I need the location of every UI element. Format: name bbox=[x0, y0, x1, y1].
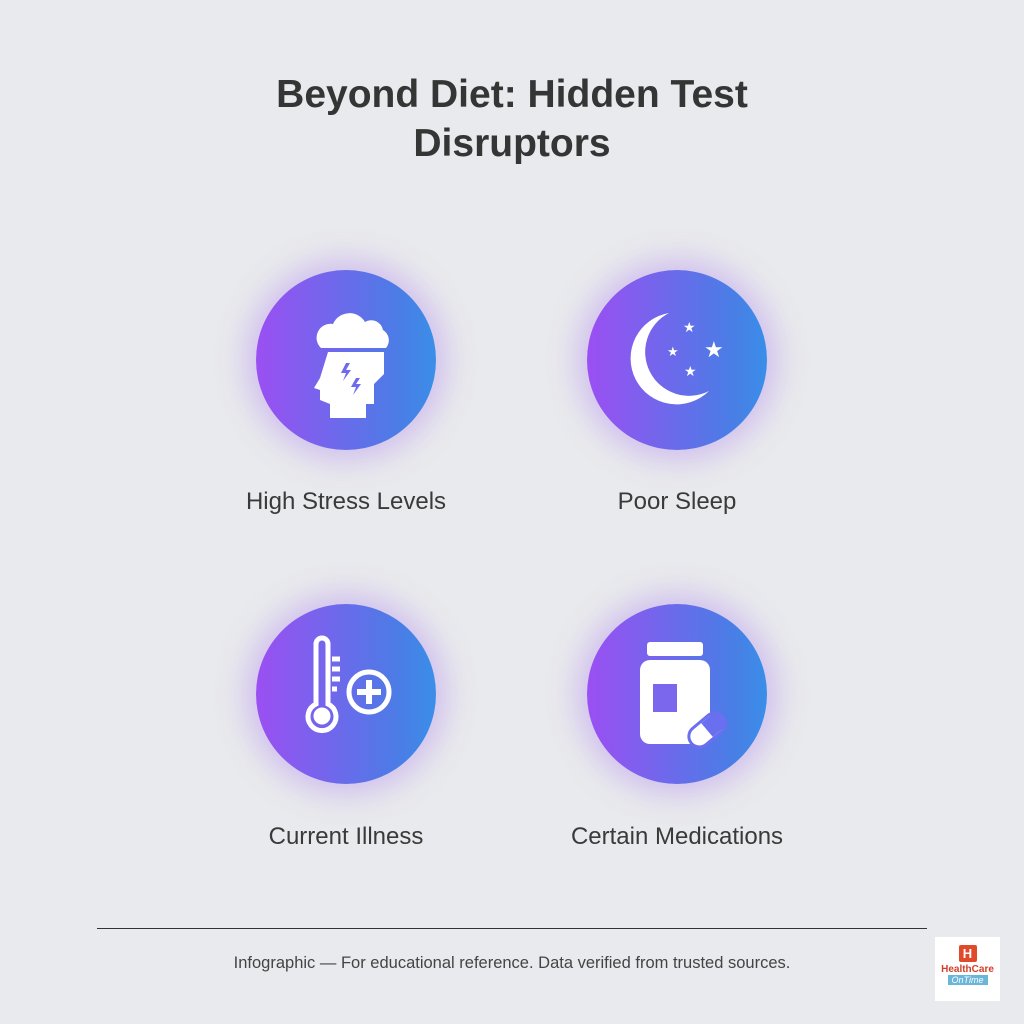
logo bbox=[935, 937, 1000, 1001]
label: medications: Certain Medications bbox=[571, 823, 783, 850]
logo: OnTime bbox=[952, 975, 983, 985]
title: Beyond Diet: Hidden Test bbox=[276, 73, 748, 116]
icon: sleep bbox=[587, 270, 767, 450]
label: sleep: Poor Sleep bbox=[618, 488, 736, 515]
footer text: Infographic — For educational reference. Data verified from trusted sources. bbox=[234, 954, 790, 972]
title bbox=[276, 73, 748, 165]
label: illness: Current Illness bbox=[269, 823, 423, 850]
icon: sleep: ★ bbox=[704, 337, 724, 362]
logo: HealthCare bbox=[941, 964, 994, 975]
icon: medications bbox=[587, 604, 767, 784]
icon: stress bbox=[256, 270, 436, 450]
icon: sleep: ★ bbox=[683, 319, 696, 335]
icon: sleep: ★ bbox=[684, 363, 697, 379]
icon: sleep: ★ bbox=[667, 344, 679, 359]
logo: H bbox=[963, 946, 972, 961]
title: Disruptors bbox=[413, 122, 611, 165]
label: stress: High Stress Levels bbox=[246, 488, 446, 515]
icon: illness bbox=[256, 604, 436, 784]
